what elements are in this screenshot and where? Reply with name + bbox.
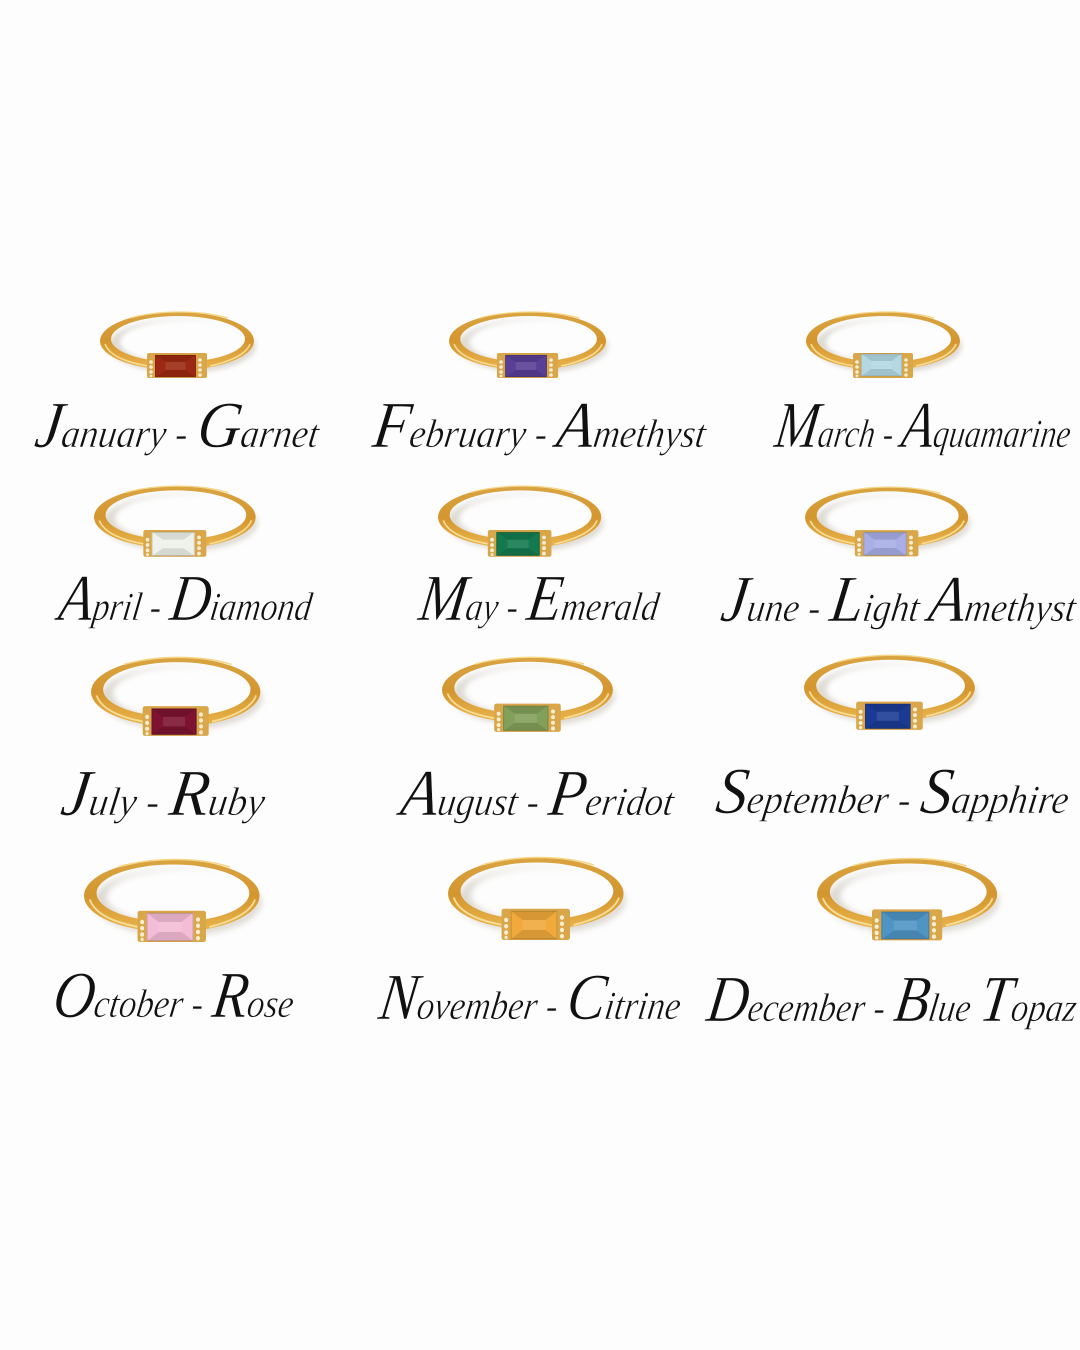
label: November: November - Citrine [374, 961, 687, 1034]
label: August: August - Peridot [393, 757, 681, 830]
ring: July ruby [91, 657, 263, 736]
ring: August peridot [442, 657, 615, 732]
ring: October rose [84, 860, 262, 942]
ring: September sapphire [804, 655, 977, 730]
ring: June light amethyst [805, 487, 970, 556]
label: December: December - Blue Topaz [702, 963, 1080, 1036]
ring: April diamond [94, 486, 258, 557]
label: June: June - Light Amethyst [717, 563, 1080, 636]
label: May: May - Emerald [414, 562, 666, 635]
ring: November citrine [448, 858, 626, 940]
label: October: October - Rose [49, 959, 300, 1032]
label: September: September - Sapphire [712, 755, 1075, 828]
ring: May emerald [438, 486, 603, 557]
label: April: April - Diamond [52, 562, 319, 635]
ring: December blue topaz [817, 858, 1000, 940]
ring: February amethyst [449, 312, 608, 378]
ring: January garnet [100, 312, 256, 378]
label: July: July - Ruby [57, 757, 271, 830]
label: February: February - Amethyst [368, 389, 713, 462]
label: January: January - Garnet [31, 389, 326, 462]
ring: March aquamarine [806, 312, 962, 378]
